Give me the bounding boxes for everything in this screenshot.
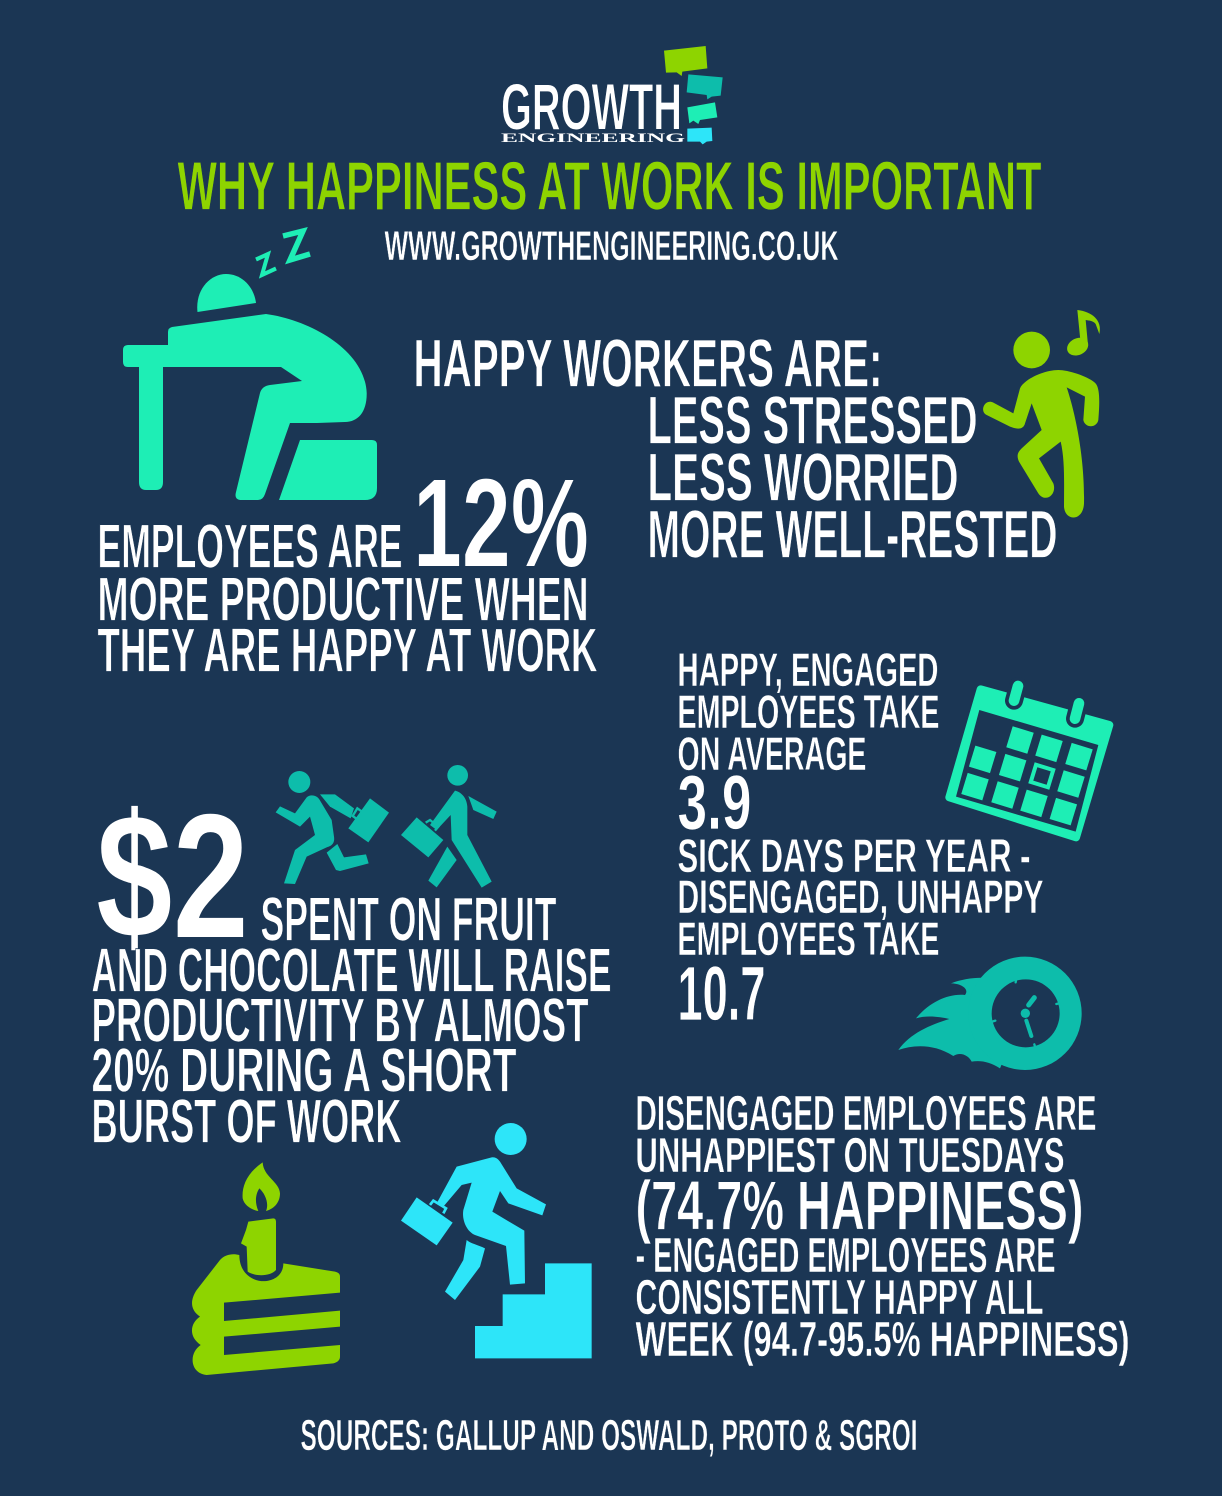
text block: employees 12% more productive: EMPLOYEES ARE (98, 512, 402, 582)
text block: happy workers are: LESS WORRIED (648, 440, 958, 516)
text block: sick days: ON AVERAGE (678, 728, 866, 781)
text block: employees 12% more productive: 12% (413, 452, 589, 594)
icon: running and walking workers with briefcases (276, 765, 497, 888)
text block: employees 12% more productive: THEY ARE HAPPY AT WORK (98, 616, 598, 686)
text block: sick days: EMPLOYEES TAKE (678, 913, 940, 966)
text block: $2 fruit and chocolate (92, 776, 612, 1156)
text block: disengaged employees (636, 1086, 1130, 1367)
logo: Growth Engineering: GROWTH (501, 70, 682, 144)
icon: sleeping worker at desk (123, 231, 377, 500)
logo: Growth Engineering: ENGINEERING (501, 130, 685, 145)
text block: $2 fruit and chocolate: AND CHOCOLATE WILL RAISE (92, 936, 612, 1006)
text block: $2 fruit and chocolate: $2 (96, 776, 249, 976)
icon: dancing worker with music note (983, 310, 1100, 518)
text block: sick days: SICK DAYS PER YEAR - (678, 830, 1030, 883)
text block: $2 fruit and chocolate: BURST OF WORK (92, 1088, 402, 1156)
text block: $2 fruit and chocolate: SPENT ON FRUIT (260, 886, 557, 954)
text block: employees 12% more productive (98, 452, 598, 686)
text block: happy workers are (414, 326, 1058, 572)
text block: sick days: 10.7 (678, 951, 766, 1037)
text block: happy workers are: HAPPY WORKERS ARE: (414, 326, 882, 402)
text block: employees 12% more productive: MORE PRODUCTIVE WHEN (98, 566, 588, 634)
icon: worker climbing stairs (401, 1123, 592, 1358)
text block: happy workers are: LESS STRESSED (648, 382, 978, 458)
icon: birthday cake slice (192, 1162, 340, 1375)
text block: sick days: HAPPY, ENGAGED (678, 644, 938, 697)
text block: sick days (678, 644, 1044, 1037)
logo: Growth Engineering (501, 46, 723, 145)
text block: $2 fruit and chocolate: PRODUCTIVITY BY ALMOST (92, 986, 589, 1056)
icon: flaming clock (898, 957, 1082, 1070)
icon: calendar (949, 686, 1109, 837)
text block: sick days: 3.9 (678, 760, 752, 846)
text block: $2 fruit and chocolate: 20% DURING A SHORT (92, 1036, 517, 1106)
website url: WWW.GROWTHENGINEERING.CO.UK (384, 222, 839, 269)
text block: sick days: EMPLOYEES TAKE (678, 686, 940, 739)
